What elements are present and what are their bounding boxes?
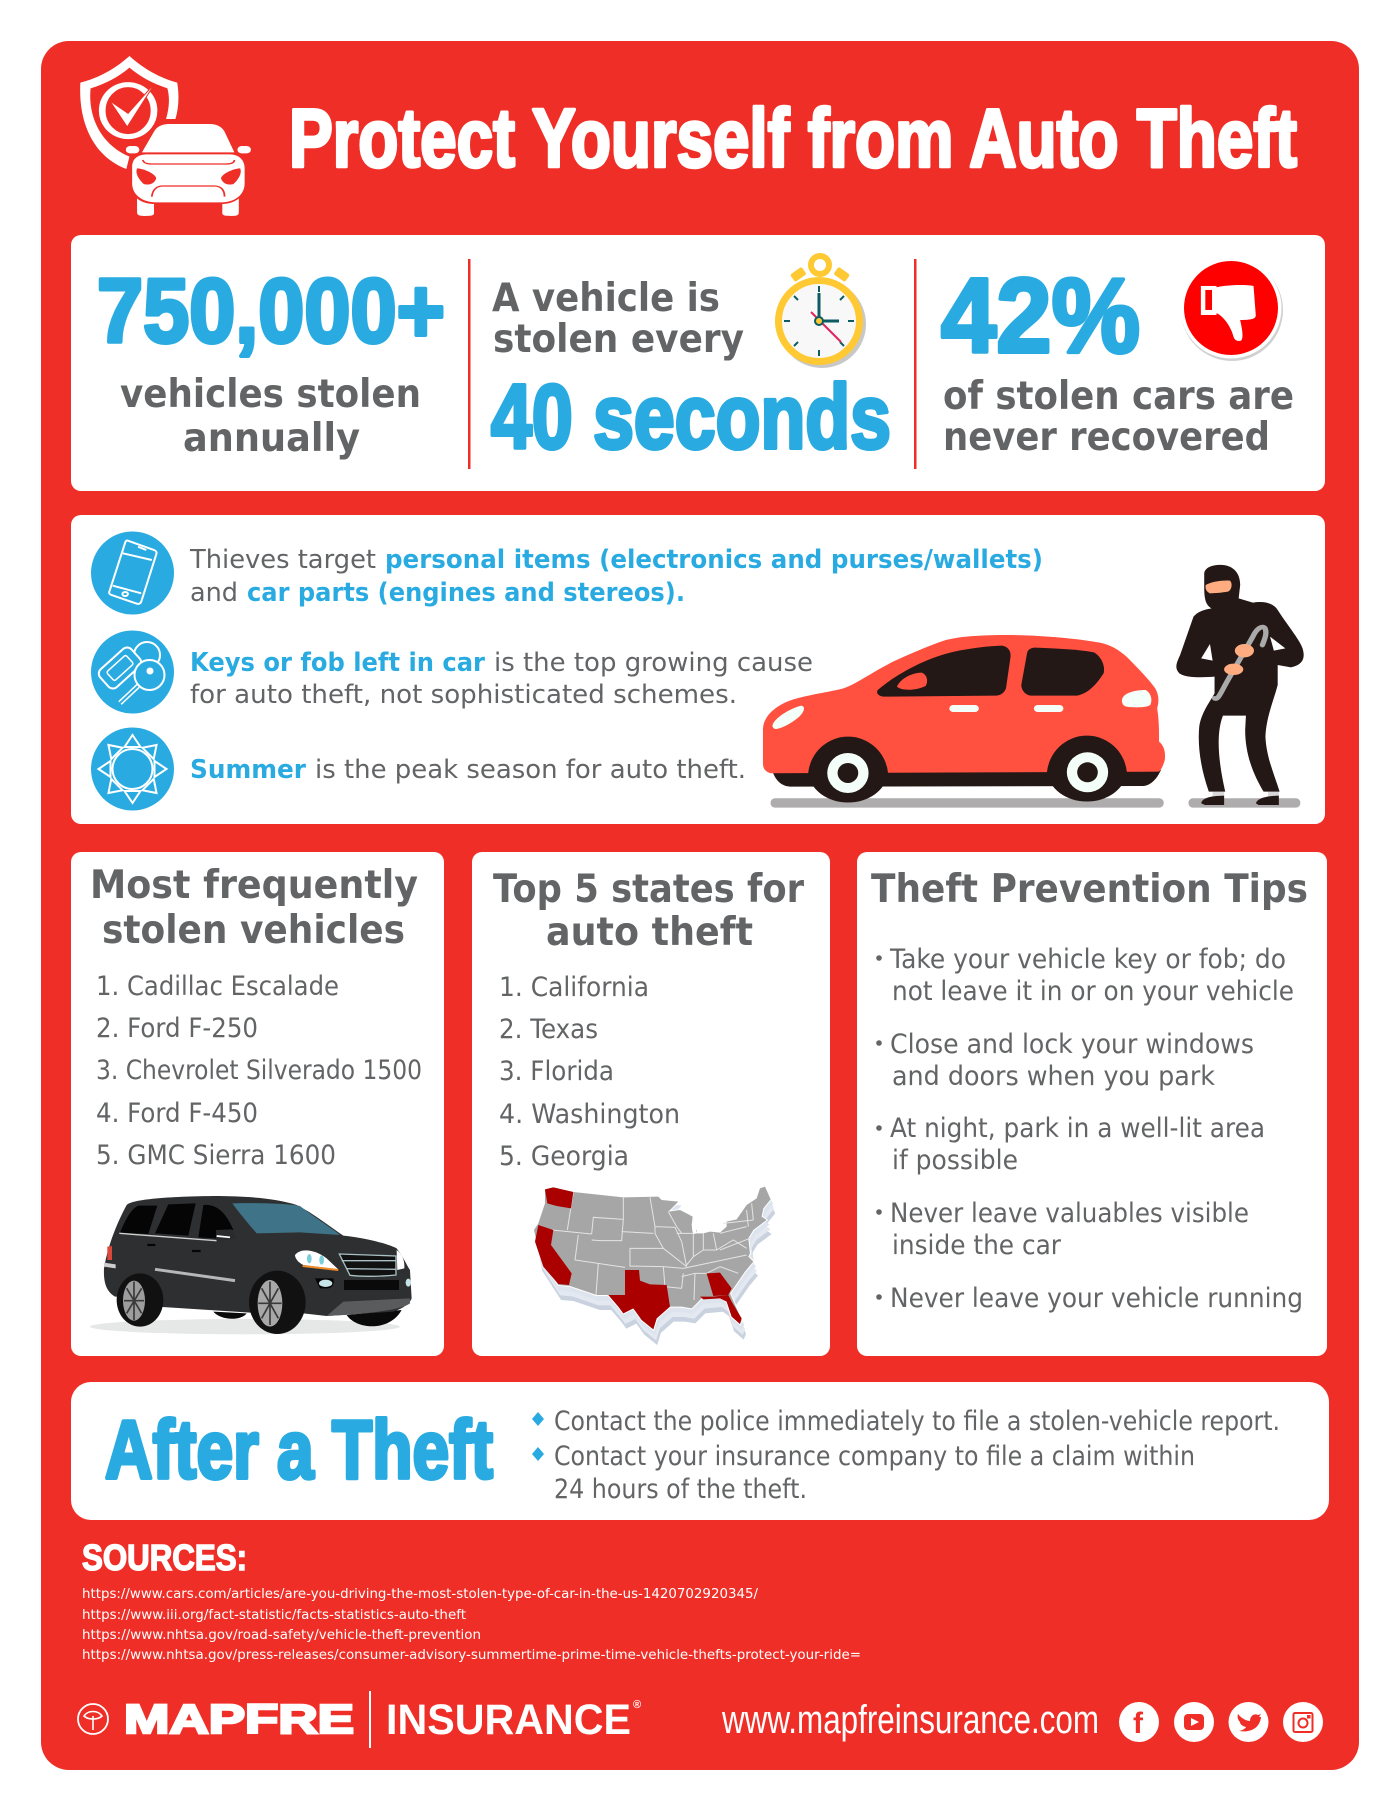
icon: sun: [91, 728, 174, 810]
vehicle list: 3. Chevrolet Silverado 1500: [96, 1055, 422, 1086]
tips list: and doors when you park: [892, 1061, 1216, 1092]
tips list: inside the car: [892, 1230, 1061, 1261]
source links: https://www.cars.com/articles/are-you-driving-the-most-stolen-type-of-car-in-the-us-1420702920345/: [82, 1587, 759, 1602]
logo: MAPFRE Insurance: [78, 1691, 641, 1748]
panel: theft prevention tips: [857, 852, 1327, 1356]
stat text: a vehicle is stolen every: stolen every: [493, 317, 744, 362]
stat caption: of stolen cars are never recovered: of stolen cars are: [943, 374, 1294, 419]
state list: 2. Texas: [499, 1014, 598, 1045]
sources heading: SOURCES:: [82, 1537, 247, 1578]
icon: facebook: [1119, 1702, 1159, 1742]
text: keys or fob: Keys or fob left in car: [190, 648, 485, 678]
heading: auto theft: [546, 910, 753, 955]
heading: [493, 867, 805, 955]
panel: key statistics: [71, 235, 1325, 491]
logo: MAPFRE Insurance: ®: [633, 1699, 641, 1711]
tips list: At night, park in a well-lit area: [890, 1113, 1265, 1144]
heading: Top 5 states for: [493, 867, 805, 912]
state list: 1. California: [499, 972, 649, 1003]
panel: theft facts: [71, 515, 1325, 824]
state list: [499, 972, 680, 1172]
illustration: red car: [763, 635, 1165, 808]
text: summer: is the peak season for auto theft.: [315, 755, 746, 785]
stat: 40 seconds: 40 seconds: [491, 367, 891, 468]
logo: MAPFRE Insurance: MAPFRE: [124, 1696, 354, 1742]
icon: instagram: [1283, 1702, 1323, 1742]
tips list: Never leave your vehicle running: [890, 1283, 1303, 1314]
vehicle list: 5. GMC Sierra 1600: [96, 1140, 336, 1171]
heading: stolen vehicles: [102, 908, 405, 953]
stat caption: vehicles stolen annually: [120, 372, 421, 461]
text: keys or fob: for auto theft, not sophisticated schemes.: [190, 680, 737, 710]
state list: 3. Florida: [499, 1056, 614, 1087]
stat: 750,000+: 750,000+: [97, 261, 445, 362]
bullet diamonds: [532, 1412, 544, 1461]
website address: www.mapfreinsurance.com: [721, 1698, 1099, 1742]
after-theft steps: [554, 1406, 1280, 1505]
after-theft steps: Contact your insurance company to file a claim within: [554, 1441, 1195, 1472]
heading: Theft Prevention Tips: [871, 867, 1308, 912]
text: personal items: [189, 545, 1043, 608]
panel: most frequently stolen vehicles: [71, 852, 444, 1356]
tips list: Close and lock your windows: [890, 1029, 1254, 1060]
vehicle list: 4. Ford F-450: [96, 1098, 258, 1129]
text: summer: Summer: [190, 755, 306, 785]
stat caption: of stolen cars are never recovered: never recovered: [943, 415, 1270, 460]
source links: https://www.iii.org/fact-statistic/facts-statistics-auto-theft: [82, 1608, 466, 1623]
panel: after a theft: [71, 1382, 1329, 1520]
tips list: not leave it in or on your vehicle: [892, 976, 1294, 1007]
stat: 42%: 42%: [941, 257, 1140, 375]
source links: https://www.nhtsa.gov/road-safety/vehicle-theft-prevention: [82, 1628, 481, 1643]
icon: facebook: f: [1133, 1707, 1144, 1740]
tips list: Never leave valuables visible: [890, 1198, 1249, 1229]
icon: phone: [91, 532, 174, 614]
vehicle list: 2. Ford F-250: [96, 1013, 258, 1044]
icon: keys: [91, 630, 174, 714]
heading: [90, 863, 418, 953]
state list: 4. Washington: [499, 1099, 680, 1130]
illustration: thief with crowbar: [1176, 565, 1304, 808]
tips list: [876, 944, 1303, 1314]
stat caption: vehicles stolen annually: vehicles stolen: [120, 372, 421, 417]
illustration: black SUV: [90, 1196, 412, 1334]
tips list: Take your vehicle key or fob; do: [889, 944, 1286, 975]
text: keys or fob: [190, 648, 813, 710]
after-theft steps: Contact the police immediately to file a stolen-vehicle report.: [554, 1406, 1280, 1437]
stat text: a vehicle is stolen every: A vehicle is: [492, 276, 720, 321]
logo: MAPFRE Insurance: INSURANCE: [386, 1696, 631, 1744]
icon: youtube: [1174, 1702, 1214, 1742]
vehicle list: [96, 971, 422, 1171]
icon: twitter: [1228, 1702, 1268, 1742]
text: personal items: car parts (engines and stereos).: [247, 578, 685, 608]
heading: Most frequently: [90, 863, 418, 908]
source links: [82, 1587, 861, 1663]
icon: shield and car: [80, 56, 251, 216]
state list: 5. Georgia: [499, 1141, 629, 1172]
stat caption: vehicles stolen annually: annually: [183, 416, 360, 461]
map: continental United States: [534, 1187, 774, 1343]
text: keys or fob: is the top growing cause: [494, 648, 813, 678]
icon: thumbs down: [1180, 258, 1283, 361]
stat caption: of stolen cars are never recovered: [943, 374, 1294, 460]
text: personal items: personal items (electronics and purses/wallets): [385, 545, 1043, 575]
text: personal items: and: [190, 578, 238, 608]
text: personal items: Thieves target: [189, 545, 376, 575]
heading: After a Theft: [105, 1403, 493, 1496]
after-theft steps: 24 hours of the theft.: [554, 1474, 807, 1505]
stat text: a vehicle is stolen every: [492, 276, 744, 362]
tips list: if possible: [892, 1145, 1018, 1176]
source links: https://www.nhtsa.gov/press-releases/consumer-advisory-summertime-prime-time-vehicle-thefts-protect-your-ride=: [82, 1648, 861, 1663]
vehicle list: 1. Cadillac Escalade: [96, 971, 339, 1002]
panel: top 5 states: [472, 852, 830, 1356]
icon: stopwatch: [778, 256, 866, 368]
